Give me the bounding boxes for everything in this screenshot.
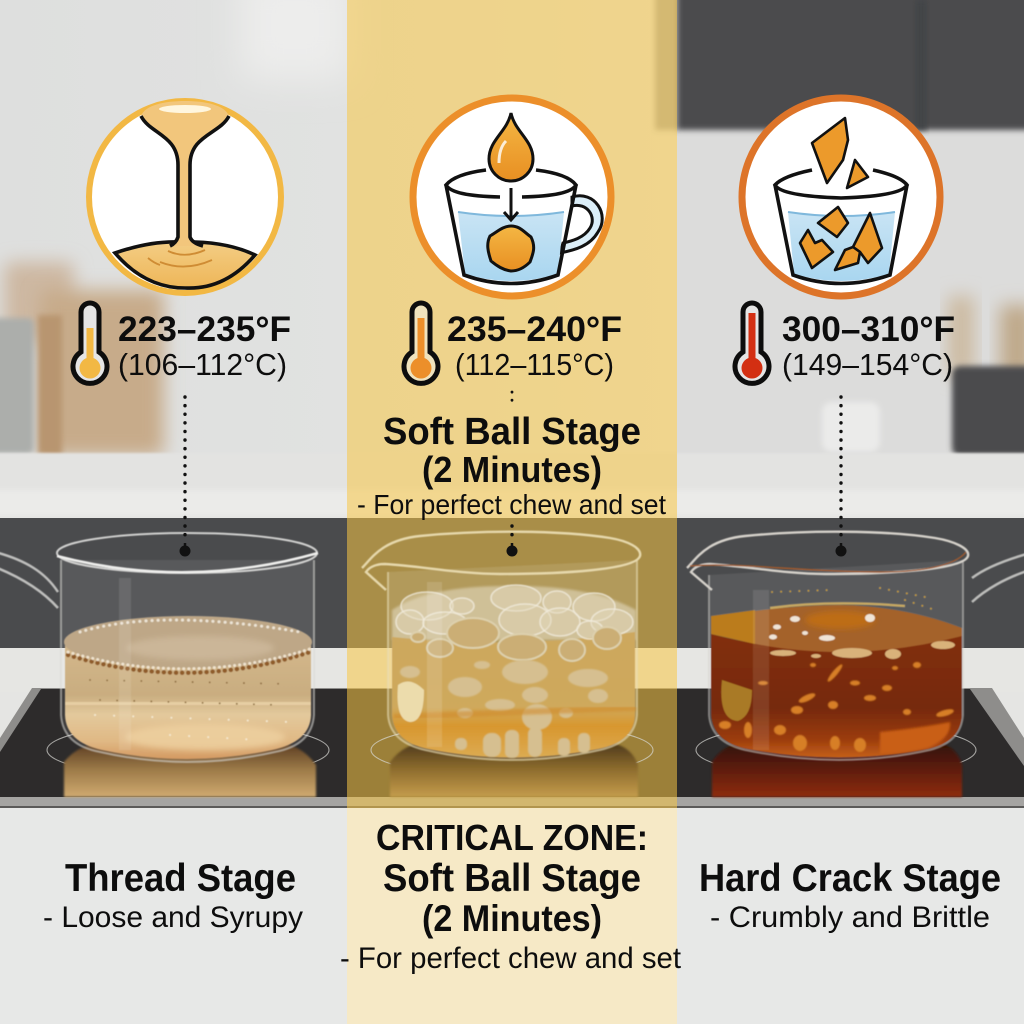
white froth [769, 614, 875, 641]
glass highlight [119, 578, 131, 750]
icon: hard crack stage [742, 98, 940, 296]
temperature: soft ball stage: (112–115°C) [455, 347, 614, 382]
icon: thread stage [89, 101, 281, 293]
caramel surface [711, 605, 962, 652]
label: hard crack stage: Hard Crack Stage [699, 857, 1001, 900]
label: thread stage [43, 857, 303, 934]
glass body [388, 560, 637, 760]
temperature: thread stage [73, 303, 291, 383]
burner rings [47, 723, 976, 777]
temperature: hard crack stage: 300–310°F [782, 310, 955, 349]
dotted leader: hard crack stage [836, 397, 846, 556]
pot: hard crack stage [687, 532, 1024, 760]
label: hard crack stage: - Crumbly and Brittle [710, 901, 990, 934]
handle [560, 196, 602, 253]
mid label: soft ball stage: Soft Ball Stage [383, 411, 641, 453]
temperature: soft ball stage [404, 303, 622, 383]
syrup surface [64, 616, 312, 668]
icon: thermometer [73, 303, 107, 383]
caramel liquid [711, 634, 962, 758]
temperature: thread stage: (106–112°C) [118, 347, 287, 382]
dotted leader: soft ball bottom [506, 526, 518, 556]
pot handle [0, 552, 58, 608]
rim and spout [687, 532, 968, 590]
water [788, 212, 895, 281]
label: hard crack stage [699, 857, 1001, 934]
dotted leader: thread stage [180, 397, 190, 556]
temperature: thread stage: 223–235°F [118, 310, 291, 349]
arrow [504, 188, 518, 220]
foam zone [392, 586, 636, 640]
rim and spout [362, 532, 640, 590]
water [458, 212, 564, 281]
pot reflections on cooktop [64, 742, 962, 797]
pot handle [972, 553, 1024, 602]
icon: soft ball stage [413, 98, 611, 296]
glass highlight [721, 680, 752, 721]
syrup liquid [392, 632, 635, 758]
temperature: hard crack stage [735, 303, 955, 383]
icon: thermometer [404, 303, 438, 383]
mid label: soft ball stage: - For perfect chew and set [357, 489, 666, 520]
label: critical zone: - For perfect chew and set [340, 942, 682, 975]
glowing base [880, 722, 950, 754]
cooktop [0, 688, 1024, 808]
label: critical zone [340, 817, 682, 975]
mid label: soft ball stage [357, 411, 666, 520]
label: thread stage: - Loose and Syrupy [43, 901, 303, 934]
foam bubbles [396, 585, 633, 639]
dotted leader: soft ball top [511, 392, 513, 402]
glass highlight [398, 681, 424, 722]
golden specks [772, 588, 935, 610]
syrup specks [90, 680, 290, 740]
pot: soft ball stage [362, 532, 640, 760]
cup [775, 185, 907, 284]
falling drop [489, 113, 533, 181]
pouring strand [141, 101, 229, 246]
highlighted column: critical zone [347, 0, 677, 1024]
glass body [61, 560, 314, 762]
rim [57, 533, 318, 573]
mid label: soft ball stage: (2 Minutes) [422, 449, 602, 490]
large bubbles at surface [411, 618, 621, 661]
cup [446, 185, 576, 284]
cream clumps [770, 641, 955, 659]
amber band [394, 708, 636, 717]
temperature: hard crack stage: (149–154°C) [782, 347, 953, 382]
bubbles in liquid [400, 660, 608, 758]
syrup liquid [65, 642, 311, 759]
pot: thread stage [0, 533, 318, 762]
shards [800, 118, 882, 270]
label: critical zone: (2 Minutes) [422, 898, 602, 939]
label: critical zone: CRITICAL ZONE: [376, 817, 648, 858]
icon: thermometer [735, 303, 769, 383]
caramel flecks [719, 662, 954, 752]
label: critical zone: Soft Ball Stage [383, 857, 641, 900]
foam line [68, 620, 310, 673]
glass body [709, 560, 963, 760]
temperature: soft ball stage: 235–240°F [447, 310, 622, 349]
soft ball [488, 226, 534, 271]
pooled syrup [115, 242, 255, 288]
label: thread stage: Thread Stage [65, 857, 296, 900]
